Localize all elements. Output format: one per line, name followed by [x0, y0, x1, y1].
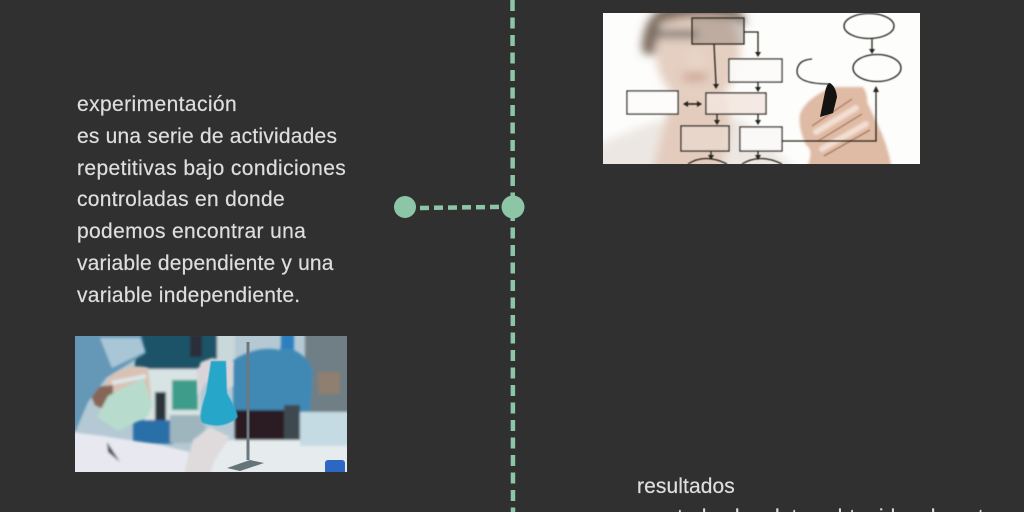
- text block: experimentación: podemos encontrar una: [77, 220, 306, 243]
- text block: experimentación: experimentación: [77, 93, 237, 116]
- technician: [70, 330, 233, 480]
- text block: experimentación: variable independiente.: [77, 284, 300, 307]
- lab stand: [246, 342, 250, 460]
- text block: experimentación: [77, 93, 346, 307]
- hand and marker: [800, 83, 892, 170]
- text block: experimentación: es una serie de actividades: [77, 125, 337, 148]
- timeline connector with nodes: [394, 0, 524, 512]
- text block: resultados: [637, 474, 996, 512]
- lower glove: [183, 427, 230, 476]
- text block: experimentación: controladas en donde: [77, 188, 285, 211]
- blue flask: [201, 361, 238, 426]
- flowchart boxes and arrows: [627, 14, 901, 164]
- photo: lab technician with blue flask: [75, 336, 347, 472]
- photo: flowchart being drawn: [603, 13, 920, 164]
- text block: experimentación: repetitivas bajo condiciones: [77, 157, 346, 180]
- text block: experimentación: variable dependiente y una: [77, 252, 334, 275]
- text block: resultados: resultados: [637, 474, 735, 498]
